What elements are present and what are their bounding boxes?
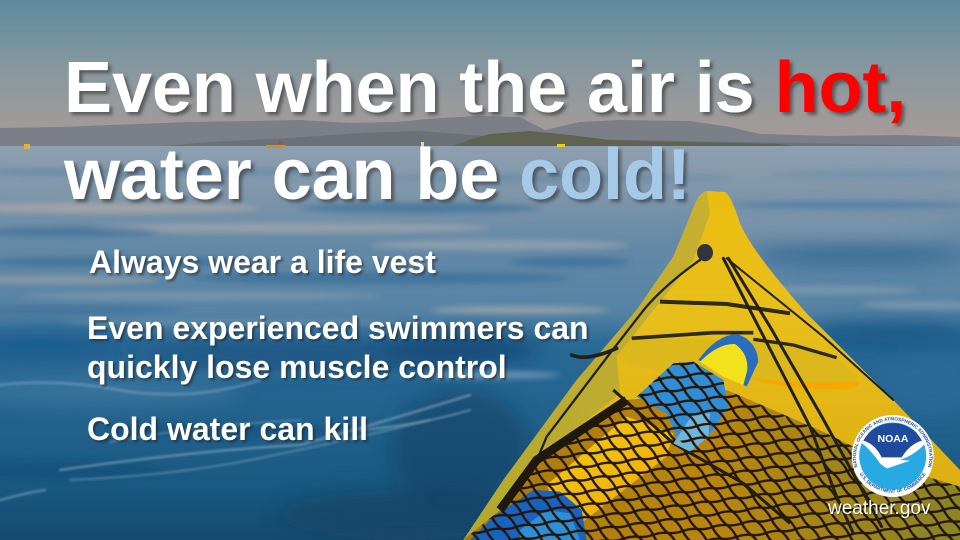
net drawcord: [613, 390, 790, 523]
logo white ring: [852, 415, 934, 497]
text: cold water: Cold water can kill: [87, 411, 368, 447]
logo gull: [859, 433, 926, 468]
cockpit moulding: [617, 337, 859, 387]
logo NOAA wordmark: NOAA: [878, 433, 909, 445]
long double bungee cords: [723, 258, 882, 533]
highlight on moulding: [747, 377, 859, 389]
water ripples: soft streaks: [0, 168, 960, 480]
text: life vest: Always wear a life vest: [89, 244, 436, 280]
text: swimmers line 1: Even experienced swimmers can: [87, 310, 589, 346]
NOAA logo: [852, 415, 934, 497]
upper blue and yellow bottle: [637, 334, 758, 452]
bungee cords on the bow: [538, 244, 893, 457]
net area: [460, 380, 960, 540]
logo ring text top: NATIONAL OCEANIC AND ATMOSPHERIC ADMINISTRATION: [852, 417, 933, 468]
small boats on the horizon: [24, 141, 565, 149]
sea: [0, 146, 960, 540]
deck straps: [632, 302, 837, 358]
green island: [450, 131, 800, 147]
title line 2: water can be cold!: [64, 135, 691, 215]
hull left shaded side: [463, 191, 710, 540]
sky: [0, 0, 960, 148]
net gathered edge: [500, 400, 627, 510]
water ripples: thin highlights: [0, 380, 470, 500]
logo upper navy: [863, 423, 922, 457]
kayak: [460, 191, 960, 540]
blue bottle under net, lower left: [470, 490, 587, 540]
text: swimmers line 2: quickly lose muscle control: [87, 349, 507, 385]
text: weather.gov: weather.gov: [828, 498, 930, 519]
logo lower cyan: [859, 422, 926, 490]
kayak hull: [463, 191, 960, 540]
logo ring text bottom: U.S. DEPARTMENT OF COMMERCE: [860, 472, 926, 493]
title line 1: Even when the air is hot,: [64, 48, 906, 128]
distant mountains: [0, 116, 960, 148]
logo gull and navy, drawn in zoom coordinates: [859, 423, 926, 468]
dark headland: [150, 131, 960, 148]
water ripples: broad tones: [0, 217, 960, 540]
net mesh: [470, 394, 960, 540]
long yellow bottle under net: [547, 417, 673, 527]
